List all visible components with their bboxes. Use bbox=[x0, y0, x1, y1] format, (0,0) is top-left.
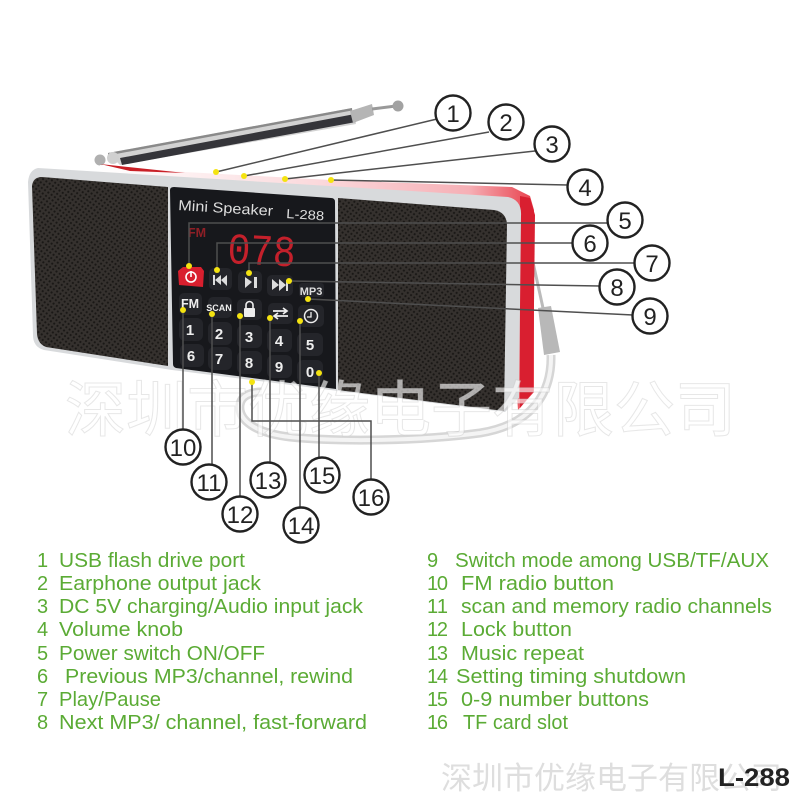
bottom company watermark: 深圳市优缘电子有限公司 bbox=[441, 761, 782, 796]
antenna bbox=[94, 100, 404, 166]
transport buttons: MP3 bbox=[300, 286, 322, 298]
legend: left column: Power switch ON/OFF bbox=[59, 643, 265, 665]
red side strip bbox=[520, 196, 535, 408]
legend: right column: Setting timing shutdown bbox=[456, 666, 686, 688]
number buttons: 5 bbox=[306, 337, 314, 354]
numbered callouts: 5 bbox=[618, 208, 632, 235]
numbered callouts: 13 bbox=[255, 468, 281, 495]
watermark: 深圳市优缘电子有限公司 bbox=[65, 376, 736, 444]
legend: left column: Play/Pause bbox=[59, 689, 161, 711]
legend: right column: FM radio button bbox=[461, 573, 614, 595]
legend: right column: Switch mode among USB/TF/AUX bbox=[455, 550, 769, 572]
model label: L-288 bbox=[718, 764, 790, 792]
legend: right column: 13 bbox=[427, 643, 448, 665]
numbered callouts: 3 bbox=[545, 132, 559, 159]
number buttons: 1 bbox=[186, 322, 194, 339]
legend: right column: 15 bbox=[427, 689, 448, 711]
legend: left column: Next MP3/ channel, fast-forward bbox=[59, 712, 367, 734]
legend: right column: Music repeat bbox=[461, 643, 584, 665]
legend: right column: 10 bbox=[427, 573, 448, 595]
numbered callouts: 11 bbox=[197, 470, 221, 497]
left speaker bbox=[32, 177, 168, 366]
numbered callouts: 4 bbox=[578, 175, 592, 202]
number buttons bbox=[179, 318, 323, 383]
legend: left column: 2 bbox=[37, 573, 48, 595]
radio body bbox=[28, 164, 535, 412]
right speaker bbox=[338, 198, 507, 411]
control panel bbox=[170, 187, 336, 389]
legend: right column: Lock button bbox=[461, 619, 572, 641]
power button bbox=[178, 267, 204, 287]
numbered callouts: 2 bbox=[499, 110, 513, 137]
number buttons: 2 bbox=[215, 326, 223, 343]
number buttons: 8 bbox=[245, 355, 253, 372]
number buttons: 4 bbox=[275, 333, 284, 350]
numbered callouts: 1 bbox=[446, 101, 460, 128]
legend: right column: scan and memory radio channels bbox=[461, 596, 772, 618]
legend: left column: Earphone output jack bbox=[59, 573, 262, 595]
display: FM bbox=[188, 226, 206, 240]
legend: right column: 16 bbox=[427, 712, 448, 734]
function buttons: SCAN bbox=[206, 303, 232, 313]
legend: right column: TF card slot bbox=[463, 712, 568, 734]
red top wedge bbox=[100, 164, 185, 173]
numbered callouts: 8 bbox=[610, 275, 624, 302]
legend: left column: 3 bbox=[37, 596, 48, 618]
legend: right column: 0-9 number buttons bbox=[461, 689, 649, 711]
legend: left column: 8 bbox=[37, 712, 48, 734]
numbered callouts: 14 bbox=[288, 513, 314, 540]
number buttons: 7 bbox=[215, 351, 223, 368]
numbered callouts: 16 bbox=[358, 485, 384, 512]
leader lines bbox=[183, 119, 635, 508]
numbered callouts: 12 bbox=[227, 502, 253, 529]
numbered callouts: 7 bbox=[645, 251, 659, 278]
display: 078 bbox=[226, 227, 297, 281]
legend: left column: 4 bbox=[37, 619, 48, 641]
numbered callouts: 10 bbox=[170, 435, 196, 462]
legend: right column bbox=[427, 550, 772, 734]
display bbox=[188, 226, 297, 281]
numbered callouts: 9 bbox=[643, 304, 657, 331]
model title: L-288 bbox=[286, 206, 325, 223]
model title: Mini Speaker bbox=[178, 198, 274, 220]
legend: right column: 14 bbox=[427, 666, 448, 688]
transport buttons bbox=[209, 268, 324, 298]
number buttons: 9 bbox=[275, 359, 283, 376]
legend: right column: 12 bbox=[427, 619, 448, 641]
callout dots bbox=[180, 169, 334, 385]
number buttons: 0 bbox=[306, 364, 314, 381]
legend: left column: 6 bbox=[37, 666, 48, 688]
legend: right column: 9 bbox=[427, 550, 438, 572]
number buttons: 6 bbox=[187, 348, 195, 365]
legend: left column: 1 bbox=[37, 550, 48, 572]
numbered callouts: 15 bbox=[309, 463, 335, 490]
numbered callouts: 6 bbox=[583, 231, 597, 258]
number buttons: 3 bbox=[245, 329, 253, 346]
legend: left column: 5 bbox=[37, 643, 48, 665]
red top surface bbox=[100, 165, 534, 410]
legend: right column: 11 bbox=[427, 596, 448, 618]
legend: left column: Previous MP3/channel, rewind bbox=[65, 666, 353, 688]
legend: left column: DC 5V charging/Audio input jack bbox=[59, 596, 364, 618]
silver frame bbox=[28, 168, 521, 412]
legend: left column bbox=[37, 550, 367, 734]
model title bbox=[178, 198, 325, 223]
legend: left column: 7 bbox=[37, 689, 48, 711]
legend: left column: USB flash drive port bbox=[59, 550, 245, 572]
numbered callouts bbox=[166, 96, 670, 542]
radio strap bbox=[240, 212, 560, 440]
function buttons bbox=[179, 293, 324, 327]
function buttons: FM bbox=[181, 297, 199, 311]
legend: left column: Volume knob bbox=[59, 619, 183, 641]
